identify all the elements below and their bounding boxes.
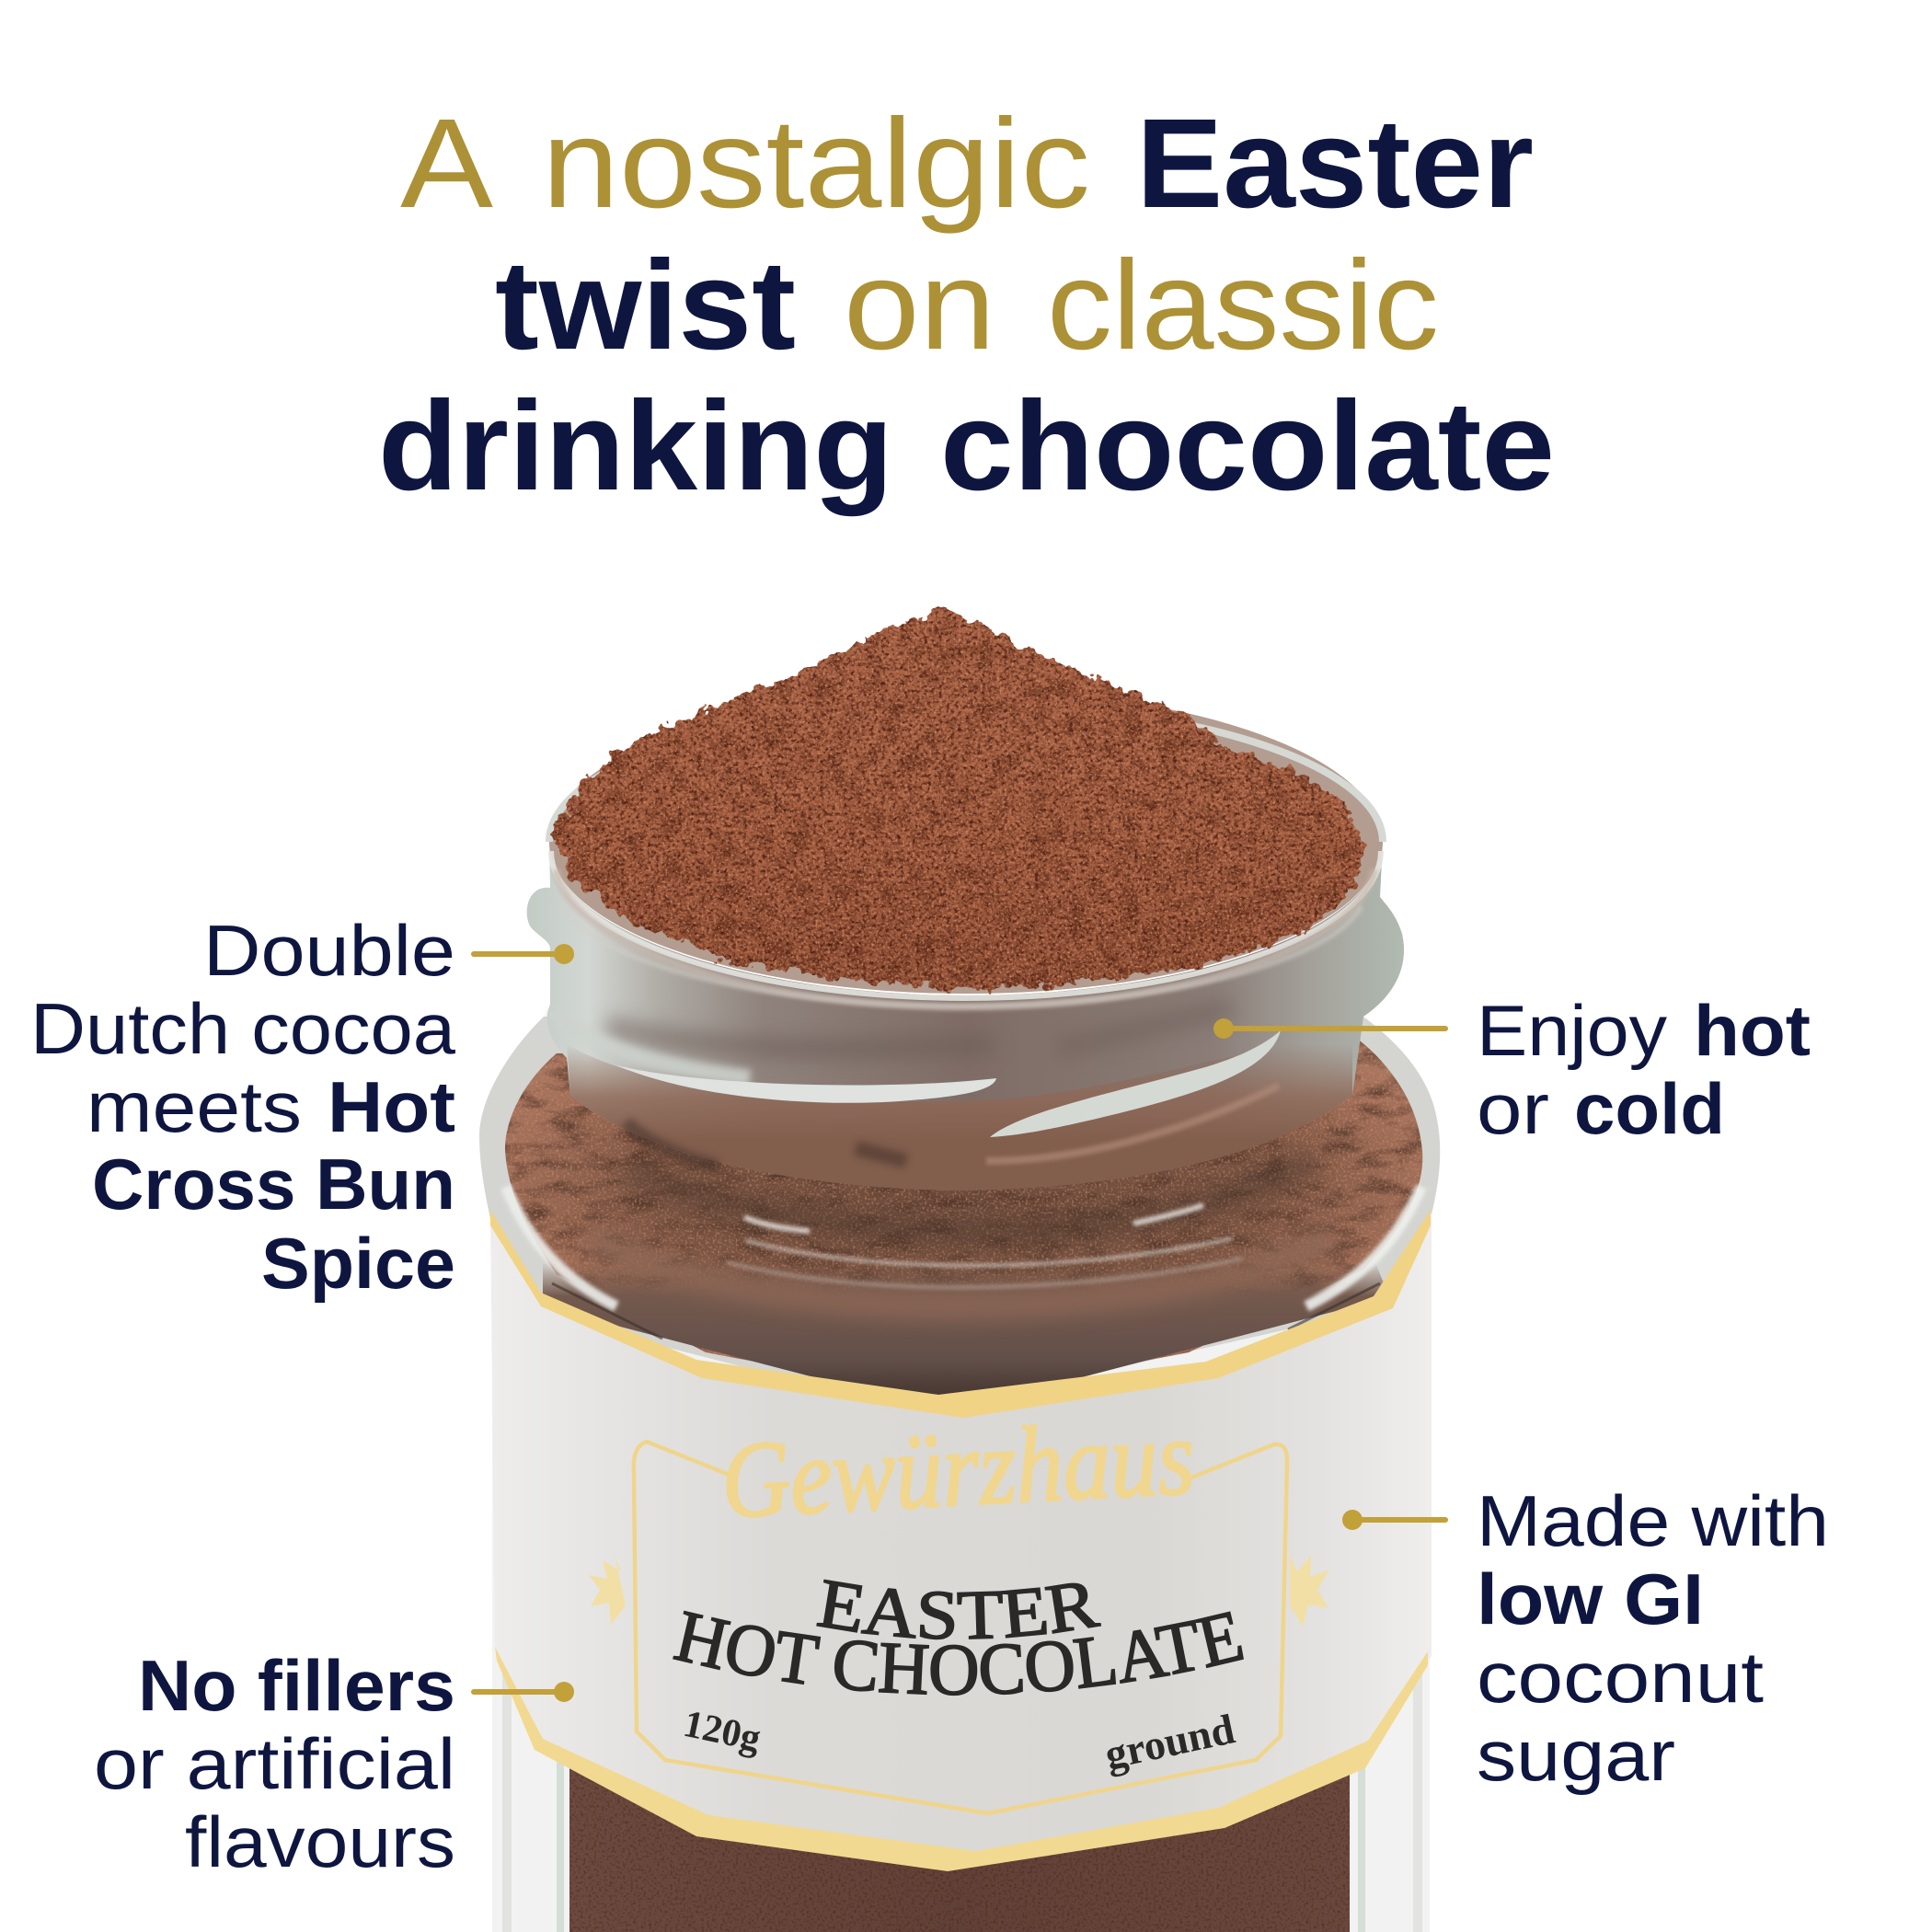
dark powder patches xyxy=(626,1122,718,1167)
callout: enjoy hot or cold: cold xyxy=(1574,1068,1725,1149)
callout: no fillers xyxy=(94,1645,455,1882)
callout: double dutch cocoa: meets xyxy=(86,1066,302,1147)
glass edges by the label xyxy=(506,1187,616,1306)
callout: enjoy hot or cold: hot xyxy=(1694,990,1811,1071)
jar shoulder xyxy=(479,1017,1440,1412)
callout: low GI coconut sugar: sugar xyxy=(1477,1715,1675,1796)
title: A xyxy=(400,93,493,235)
left thread highlight xyxy=(552,1010,750,1078)
callout: enjoy hot or cold: or xyxy=(1477,1068,1549,1149)
title: on xyxy=(844,235,995,376)
brand script: Gewürzhaus xyxy=(719,1397,1197,1541)
label paper xyxy=(490,1213,1432,1869)
callout: no fillers: flavours xyxy=(185,1801,455,1882)
callout: double dutch cocoa: Spice xyxy=(261,1223,455,1304)
leader: low GI coconut sugar xyxy=(1342,1510,1445,1530)
callout: low GI coconut sugar xyxy=(1477,1480,1829,1796)
callout: low GI coconut sugar: coconut xyxy=(1477,1637,1764,1718)
callout: enjoy hot or cold xyxy=(1477,990,1811,1149)
product name: EASTER xyxy=(816,1579,1102,1639)
inner gold frame xyxy=(634,1442,1287,1813)
front rim lines xyxy=(551,851,1381,998)
callout: no fillers: or artificial xyxy=(94,1723,455,1804)
title: twist xyxy=(495,235,796,376)
jar of hot chocolate xyxy=(479,606,1441,1932)
star anise left xyxy=(589,1555,626,1625)
callout: enjoy hot or cold: Enjoy xyxy=(1477,990,1667,1071)
callout: double dutch cocoa: Double xyxy=(203,910,455,991)
title: classic xyxy=(1047,235,1439,376)
title xyxy=(378,93,1555,517)
callout: double dutch cocoa xyxy=(30,910,456,1304)
title: nostalgic xyxy=(542,93,1090,235)
callout: double dutch cocoa: Dutch cocoa xyxy=(30,988,456,1069)
bottom gold band xyxy=(495,1647,1428,1871)
leader: no fillers xyxy=(474,1682,574,1702)
silver crescent right xyxy=(990,1030,1281,1137)
callout: double dutch cocoa: Cross Bun xyxy=(92,1144,455,1225)
callout: low GI coconut sugar: Made with xyxy=(1477,1480,1829,1561)
callout: no fillers: No fillers xyxy=(138,1645,455,1726)
top gold band xyxy=(490,1210,1431,1418)
title: drinking xyxy=(378,375,893,517)
callout: double dutch cocoa: Hot xyxy=(328,1066,455,1147)
leader: enjoy hot or cold xyxy=(1213,1018,1445,1039)
label xyxy=(490,1210,1432,1871)
title: Easter xyxy=(1136,93,1534,235)
jar body below the label xyxy=(492,1196,1430,1932)
grind: ground xyxy=(1100,1705,1239,1778)
silver crescent left xyxy=(616,1065,996,1103)
callout: low GI coconut sugar: low GI xyxy=(1477,1558,1704,1639)
cocoa powder mound xyxy=(552,607,1363,990)
title: chocolate xyxy=(940,375,1555,517)
star anise right xyxy=(1290,1555,1329,1627)
jar neck with threads xyxy=(527,690,1404,1190)
weight: 120g xyxy=(680,1703,765,1760)
glass glints on shoulder xyxy=(744,1217,810,1231)
jar mouth behind the powder xyxy=(549,690,1383,994)
leader: double dutch cocoa xyxy=(474,944,574,964)
product name: HOT CHOCOLATE xyxy=(673,1610,1244,1696)
